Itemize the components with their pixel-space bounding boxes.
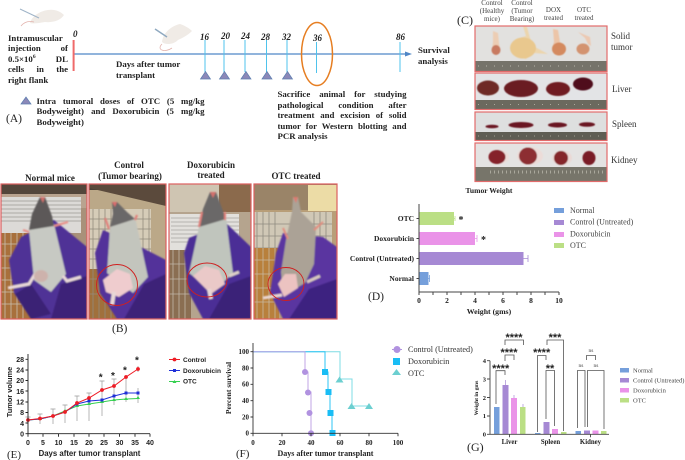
panel F: survival chart bbox=[224, 343, 473, 460]
significance brackets bbox=[496, 340, 604, 432]
timeline day labels: 24 bbox=[240, 31, 250, 41]
sacrifice timepoint ellipse bbox=[302, 22, 332, 86]
column headers: Bearing) bbox=[510, 15, 535, 23]
legend: OTC bbox=[183, 378, 197, 386]
axes bbox=[416, 204, 559, 295]
axis numbers: 0 bbox=[417, 296, 421, 305]
column headers: DOX bbox=[546, 6, 561, 14]
dose legend icon bbox=[21, 97, 31, 104]
axes bbox=[250, 343, 398, 436]
legend: OTC bbox=[570, 241, 586, 250]
x axis title: Days after tumor transplant bbox=[39, 449, 141, 458]
error bars bbox=[26, 366, 138, 424]
panel E: tumor volume line chart bbox=[5, 354, 221, 460]
axis numbers: 15 bbox=[70, 440, 78, 447]
axes bbox=[26, 354, 150, 437]
significance marks: **** bbox=[533, 347, 551, 359]
organ labels: tumor bbox=[611, 42, 633, 52]
significance stars bbox=[99, 356, 139, 384]
line: Control bbox=[26, 367, 140, 422]
axis numbers: 40 bbox=[146, 440, 154, 447]
axis numbers: 0 bbox=[246, 430, 250, 438]
organ labels bbox=[611, 31, 638, 165]
organ labels: Liver bbox=[612, 84, 632, 94]
panel D: tumor weight bar chart bbox=[350, 186, 634, 316]
axis numbers: 5 bbox=[41, 440, 45, 447]
significance marks: *** bbox=[549, 332, 562, 344]
category labels: Control (Untreated) bbox=[350, 254, 414, 263]
photo: spleen bbox=[475, 112, 607, 140]
axis numbers bbox=[483, 358, 487, 438]
legend bbox=[392, 345, 473, 378]
axis numbers: 28 bbox=[16, 357, 24, 364]
category labels bbox=[350, 214, 415, 283]
significance stars: * bbox=[123, 366, 127, 376]
label: survival analysis bbox=[418, 45, 450, 66]
photo: tumor bearing mouse bbox=[89, 184, 166, 319]
column headers: Control bbox=[114, 160, 144, 170]
column headers: Normal mice bbox=[25, 173, 75, 183]
panel label C: (C) bbox=[457, 13, 473, 27]
axis numbers: 3 bbox=[483, 376, 487, 384]
timeline day labels: 0 bbox=[73, 29, 78, 39]
significance marks: **** bbox=[492, 363, 510, 375]
bars: spleen bbox=[535, 422, 566, 434]
axis numbers: 25 bbox=[100, 440, 108, 447]
panel label B: (B) bbox=[112, 323, 128, 335]
text: sacrifice note: PCR analysis bbox=[278, 131, 328, 141]
axis numbers bbox=[417, 296, 563, 305]
text: injection note: Intramuscular bbox=[8, 33, 63, 43]
text: dose legend: Intra tumoral doses of OTC (5 mg/kg bbox=[36, 96, 204, 106]
legend: Control (Untreated) bbox=[408, 345, 473, 354]
panel C: organ photographs bbox=[457, 0, 638, 182]
significance stars: * bbox=[458, 215, 464, 226]
text: injection note: right flank bbox=[8, 75, 48, 85]
column headers: Doxorubicin bbox=[187, 160, 235, 170]
category labels bbox=[502, 439, 602, 446]
axis numbers: 0 bbox=[20, 432, 24, 438]
category labels: OTC bbox=[398, 214, 414, 223]
x axis title: Days after tumor transplant bbox=[278, 449, 374, 458]
timeline axis bbox=[73, 40, 412, 73]
axis numbers: 30 bbox=[116, 440, 123, 447]
column headers: treated bbox=[574, 14, 594, 22]
photo: doxorubicin mouse bbox=[169, 184, 251, 319]
organ labels: Spleen bbox=[612, 119, 637, 129]
icon: mouse receiving dose bbox=[155, 24, 192, 51]
axes bbox=[487, 361, 609, 437]
line: OTC bbox=[28, 396, 140, 420]
text: injection note: cells in the bbox=[8, 64, 68, 74]
icon: injected mouse bbox=[20, 9, 64, 26]
label: survival analysis: Survival bbox=[418, 45, 450, 55]
axis numbers: 4 bbox=[20, 421, 24, 428]
panel G: organ weight bar chart: ns bbox=[594, 363, 598, 369]
axis numbers: 8 bbox=[529, 296, 533, 305]
axis numbers: 2 bbox=[445, 296, 449, 305]
timeline day labels: 36 bbox=[312, 33, 322, 43]
panel G: organ weight bar chart: ns bbox=[589, 348, 593, 354]
axis numbers: 0 bbox=[251, 439, 255, 447]
category labels: Doxorubicin bbox=[374, 234, 415, 243]
legend: Normal bbox=[570, 206, 595, 215]
timeline day labels: 86 bbox=[396, 32, 406, 42]
dose triangles bbox=[200, 72, 292, 79]
significance stars: * bbox=[481, 235, 486, 246]
axis numbers bbox=[16, 357, 154, 447]
axis numbers: 100 bbox=[238, 348, 250, 356]
text: sacrifice note: tumor for Western blotting and bbox=[278, 121, 406, 131]
column headers: OTC bbox=[577, 6, 591, 14]
photo: normal mouse bbox=[1, 184, 87, 319]
panel label D: (D) bbox=[368, 291, 384, 303]
category labels: Normal bbox=[389, 274, 414, 283]
legend bbox=[554, 206, 634, 250]
column headers: (Healthy bbox=[480, 7, 505, 15]
significance marks: **** bbox=[505, 332, 523, 344]
timeline day labels: 16 bbox=[200, 32, 210, 42]
category labels: Spleen bbox=[541, 439, 560, 446]
panel A: experimental timeline bbox=[6, 9, 450, 143]
label: days after transplant: Days after tumor bbox=[116, 59, 180, 69]
axis numbers: 40 bbox=[308, 439, 315, 447]
panel label G: (G) bbox=[467, 440, 484, 454]
significance stars: * bbox=[111, 371, 115, 382]
axis numbers: 20 bbox=[242, 414, 250, 422]
axis numbers: 20 bbox=[278, 439, 286, 447]
text: injection note: 0.5×106 DL bbox=[8, 54, 68, 64]
axis numbers: 80 bbox=[242, 364, 250, 372]
significance stars bbox=[458, 215, 486, 246]
y axis title: Percent survival bbox=[224, 362, 233, 414]
organ labels: Kidney bbox=[611, 155, 638, 165]
organ labels: Solid bbox=[611, 31, 631, 41]
legend: Control bbox=[183, 357, 206, 364]
timeline day labels bbox=[73, 29, 406, 43]
photo: kidney bbox=[475, 143, 607, 182]
legend: OTC bbox=[408, 369, 425, 378]
axis numbers: 4 bbox=[483, 358, 487, 365]
curve: Doxorubicin bbox=[253, 352, 336, 436]
text: sacrifice note bbox=[278, 89, 410, 143]
photo: solid tumor bbox=[475, 26, 607, 72]
axis numbers: 4 bbox=[473, 296, 477, 305]
panel label A: (A) bbox=[6, 113, 22, 125]
category labels: Liver bbox=[502, 439, 517, 446]
legend bbox=[620, 368, 684, 404]
text: injection note: injection of bbox=[8, 43, 68, 53]
axis numbers: 100 bbox=[393, 439, 404, 447]
photo: liver bbox=[475, 73, 607, 110]
text: dose legend bbox=[36, 96, 206, 130]
curve: OTC bbox=[253, 352, 373, 409]
panel label F: (F) bbox=[236, 448, 250, 460]
panel B: mouse photographs bbox=[1, 160, 337, 335]
line: Doxorubicin bbox=[28, 392, 140, 420]
y axis title: Tumor volume bbox=[5, 367, 14, 417]
axis numbers: 6 bbox=[501, 296, 505, 305]
label: days after transplant bbox=[116, 59, 180, 80]
photo: OTC mouse bbox=[254, 184, 337, 319]
column headers: mice) bbox=[484, 15, 501, 23]
axis numbers: 12 bbox=[16, 400, 24, 406]
axis numbers: 20 bbox=[85, 440, 93, 447]
axis numbers: 35 bbox=[131, 440, 139, 447]
category labels: Kidney bbox=[580, 439, 602, 446]
axis numbers: 60 bbox=[336, 439, 344, 447]
label: survival analysis: analysis bbox=[418, 56, 448, 66]
axis numbers: 0 bbox=[483, 432, 486, 438]
axis title: Weight (gms) bbox=[467, 307, 512, 316]
bars: liver bbox=[494, 380, 526, 434]
significance marks: **** bbox=[500, 347, 518, 359]
axis numbers: 8 bbox=[20, 410, 24, 417]
axis numbers: 1 bbox=[483, 413, 486, 420]
axis numbers: 24 bbox=[16, 368, 24, 374]
axis numbers: 10 bbox=[555, 296, 563, 305]
legend: Normal bbox=[633, 368, 653, 374]
axis numbers: 40 bbox=[242, 397, 250, 405]
text: dose legend: Bodyweight) and Doxorubicin (5 mg/kg bbox=[36, 106, 204, 116]
column headers: (Tumor bearing) bbox=[98, 171, 162, 181]
text: sacrifice note: Sacrifice animal for studying bbox=[278, 89, 406, 99]
y axis title: Weight in gms bbox=[474, 380, 480, 415]
axis numbers: 0 bbox=[26, 440, 30, 447]
axis numbers: 20 bbox=[16, 378, 24, 385]
column headers: OTC treated bbox=[271, 171, 321, 181]
axis numbers: 2 bbox=[483, 395, 486, 402]
panel G: organ weight bar chart: ns bbox=[579, 363, 583, 369]
column headers bbox=[25, 160, 321, 183]
column headers: treated bbox=[544, 14, 564, 22]
text: injection note bbox=[8, 33, 70, 87]
column headers: (Tumor bbox=[511, 7, 533, 15]
panel G: organ weight bar chart bbox=[467, 332, 684, 454]
legend: Control (Untreated) bbox=[570, 218, 634, 226]
significance marks: ** bbox=[546, 363, 555, 375]
label: days after transplant: transplant bbox=[116, 70, 155, 80]
bars: kidney bbox=[576, 430, 606, 434]
axis numbers: 10 bbox=[55, 440, 62, 447]
significance stars: * bbox=[99, 372, 103, 384]
legend: Doxorubicin bbox=[570, 230, 610, 238]
axis numbers: 80 bbox=[366, 439, 373, 447]
significance marks bbox=[492, 332, 562, 375]
column headers bbox=[480, 0, 594, 23]
text: dose legend: Bodyweight) bbox=[36, 117, 84, 127]
curve: Control bbox=[253, 352, 314, 436]
legend: Control (Untreated) bbox=[633, 378, 684, 384]
legend: OTC bbox=[633, 398, 646, 404]
legend: Doxorubicin bbox=[183, 368, 221, 375]
legend bbox=[169, 357, 221, 386]
significance stars: * bbox=[135, 356, 139, 366]
timeline day labels: 20 bbox=[220, 31, 230, 41]
timeline day labels: 32 bbox=[281, 32, 292, 42]
text: sacrifice note: pathological condition after bbox=[278, 100, 406, 110]
axis numbers: 16 bbox=[16, 389, 24, 396]
chart title: Tumor Weight bbox=[466, 186, 513, 195]
legend: Doxorubicin bbox=[408, 357, 449, 366]
axis numbers: 60 bbox=[242, 380, 250, 388]
legend: Doxorubicin bbox=[633, 388, 667, 394]
column headers: treated bbox=[197, 170, 225, 180]
axis numbers bbox=[238, 348, 404, 447]
timeline day labels: 28 bbox=[260, 32, 270, 42]
bars bbox=[420, 212, 528, 285]
text: sacrifice note: treatment and excision of solid bbox=[278, 110, 406, 120]
